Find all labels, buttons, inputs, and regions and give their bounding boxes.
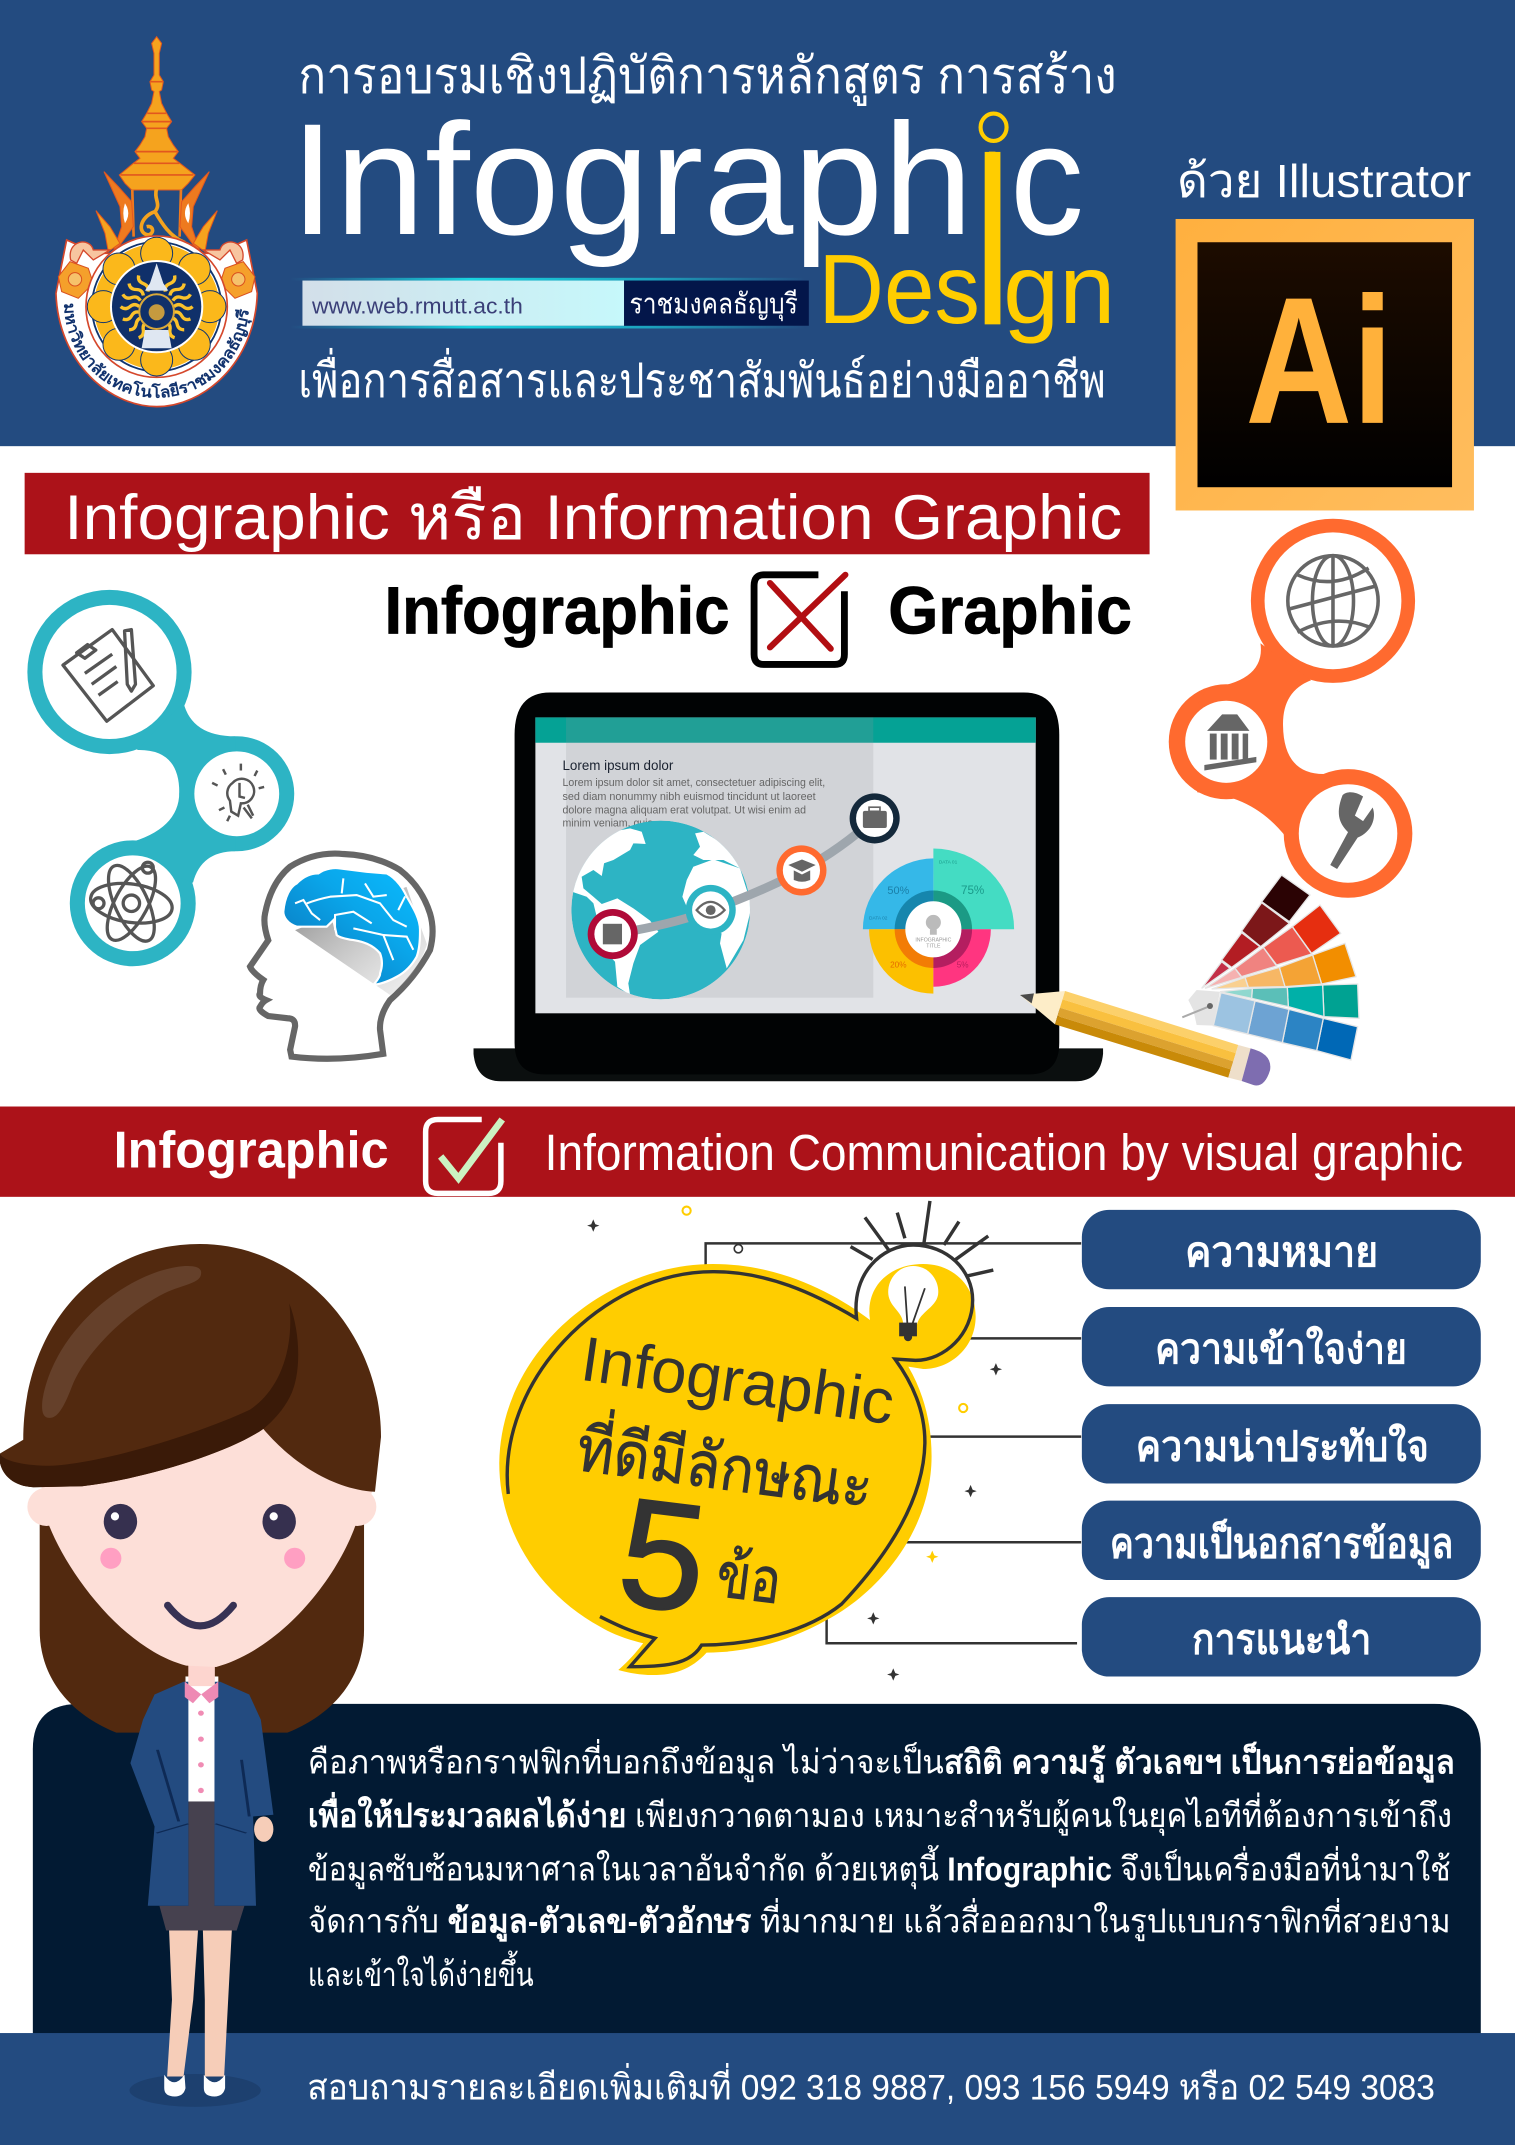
panel: header background <box>0 0 1515 446</box>
heading: Infographic Design wordmark: c <box>1010 90 1084 268</box>
icon: bank building <box>1204 714 1256 771</box>
text block: description: เพื่อให้ประมวลผลได้ง่าย เพียงกวาดตามอง เหมาะสำหรับผู้คนในยุคไอทีที่ต้องการเข้าถึง <box>308 1791 1452 1836</box>
swatch strip: oranges <box>1212 943 1356 989</box>
heading: Infographic Design wordmark: Infograph <box>290 90 973 268</box>
text block: description: คือภาพหรือกราฟฟิกที่บอกถึงข้อมูล ไม่ว่าจะเป็นสถิติ ความรู้ ตัวเลขฯ เป็นการย่อข้อมูล <box>308 1739 1455 1784</box>
comparison: Infographic is not just Graphic <box>385 574 1132 664</box>
donut chart: INFOGRAPHIC <box>915 938 952 944</box>
brain shadow <box>295 887 427 995</box>
fringe <box>0 1244 381 1492</box>
donut chart: 50% <box>887 885 910 897</box>
icon: bulb with clock <box>212 764 264 821</box>
text block: description: ข้อมูลซับซ้อนมหาศาลในเวลาอันจำกัด ด้วยเหตุนี้ Infographic จึงเป็นเครื่องมือที่นำมาใช้ <box>308 1844 1451 1889</box>
icon group: orange bubbles <box>1169 519 1415 898</box>
donut chart: DATA 02 <box>869 916 888 922</box>
pill: easy to understand <box>1082 1307 1481 1386</box>
hair highlight <box>42 1266 201 1418</box>
website address bar: ราชมงคลธัญบุรี <box>630 288 798 321</box>
laptop with infographic dashboard <box>474 693 1103 1081</box>
text block: contact details: สอบถามรายละเอียดเพิ่มเติมที่ 092 318 9887, 093 156 5949 หรือ 02 549 3083 <box>307 2062 1435 2107</box>
pill: meaning <box>1082 1210 1481 1289</box>
jacket right panel <box>214 1682 273 1906</box>
speech bubble: five characteristics: Infographic <box>577 1324 898 1438</box>
donut chart: 20% <box>890 961 907 970</box>
screen text: Lorem ipsum dolor sit amet, consectetuer adipiscing elit, <box>562 777 825 789</box>
donut chart: 5% <box>957 961 969 970</box>
icon: atom <box>88 859 175 947</box>
neck <box>188 1659 215 1686</box>
screen text: sed diam nonummy nibh euismod tincidunt ut laoreet <box>562 791 816 803</box>
pill: guidance: การแนะนำ <box>1192 1616 1371 1662</box>
icon: Adobe Illustrator logo <box>1176 219 1474 510</box>
connector lines <box>706 1243 1081 1643</box>
smile <box>168 1605 233 1626</box>
globe <box>571 821 750 999</box>
icon group: teal knowledge bubbles <box>27 590 294 966</box>
comparison: Infographic is not just Graphic: Graphic <box>888 574 1132 649</box>
text block: description <box>308 1739 1455 1994</box>
screen text <box>562 758 825 830</box>
screen text: minim veniam, quis <box>562 818 653 830</box>
eyes <box>104 1504 137 1539</box>
swatch strip: reds <box>1205 905 1341 988</box>
icon: wrench <box>1330 792 1374 869</box>
character: businesswoman <box>0 1244 381 2107</box>
speech bubble: five characteristics: ที่ดีมีลักษณะ <box>573 1405 878 1523</box>
donut chart <box>863 849 1014 994</box>
screen text: Lorem ipsum dolor <box>562 758 674 773</box>
pill: unique information <box>1082 1501 1481 1580</box>
icon: check box <box>426 1120 502 1193</box>
heading: Infographic Design wordmark: gn <box>1003 234 1115 344</box>
website address bar <box>290 278 809 328</box>
brain <box>283 868 420 985</box>
heading: Infographic Design wordmark: i <box>984 235 1000 344</box>
website address bar: www.web.rmutt.ac.th <box>311 293 523 318</box>
heading: with Illustrator: ด้วย Illustrator <box>1177 155 1471 207</box>
screen text: dolore magna aliquam erat volutpat. Ut wisi enim ad <box>562 804 806 816</box>
speech bubble: five characteristics: ข้อ <box>713 1540 785 1618</box>
panel: footer background <box>0 2033 1515 2145</box>
heading: training course line: การอบรมเชิงปฏิบัติการหลักสูตร การสร้าง <box>298 47 1117 106</box>
heading: purpose line: เพื่อการสื่อสารและประชาสัมพันธ์อย่างมืออาชีพ <box>298 348 1106 408</box>
heading: Infographic Design wordmark: i <box>984 94 1000 268</box>
timeline path <box>613 818 875 934</box>
face <box>41 1423 372 1667</box>
speech bubble: five characteristics <box>499 1201 993 1675</box>
donut chart: 75% <box>961 884 984 897</box>
shirt <box>185 1676 218 1801</box>
pill: impressive <box>1082 1404 1481 1484</box>
jacket left panel <box>130 1682 188 1906</box>
pill: easy to understand: ความเข้าใจง่าย <box>1155 1325 1407 1372</box>
hand <box>254 1816 273 1842</box>
icon: Adobe Illustrator logo: Ai <box>1245 260 1393 462</box>
fringe shadow <box>0 1303 298 1487</box>
donut chart: TITLE <box>926 944 941 950</box>
comparison: Infographic is not just Graphic: Infographic <box>385 574 729 649</box>
swatch strip: dark reds <box>1202 875 1310 988</box>
shirt buttons <box>198 1710 204 1793</box>
text block: description: และเข้าใจได้ง่ายขึ้น <box>308 1950 534 1994</box>
text block: description: จัดการกับ ข้อมูล-ตัวเลข-ตัวอักษร ที่มากมาย แล้วสื่อออกมาในรูปแบบกราฟิกที่สวยงาม <box>308 1897 1451 1942</box>
icon: clipboard <box>63 630 153 721</box>
right shoe <box>204 2075 225 2096</box>
banner: Infographic equals information communication <box>0 1107 1515 1197</box>
pill: impressive: ความน่าประทับใจ <box>1136 1422 1429 1469</box>
heading: Infographic Design wordmark: Des <box>818 234 980 344</box>
left shoe <box>164 2075 185 2096</box>
speech bubble: five characteristics: 5 <box>610 1466 716 1646</box>
banner: Infographic equals information communication: Infographic <box>114 1121 389 1179</box>
skirt <box>159 1800 244 1930</box>
donut chart: DATA 01 <box>939 860 958 866</box>
bow <box>185 1682 218 1703</box>
body <box>130 1676 273 2096</box>
panel: description background <box>33 1704 1481 2034</box>
pill: meaning: ความหมาย <box>1185 1229 1378 1275</box>
icon: colour swatch fan <box>1182 875 1359 1060</box>
pill: guidance <box>1082 1597 1481 1677</box>
swatch strip: blues <box>1213 993 1358 1060</box>
university crest logo: มหาวิทยาลัยเทคโนโลยีราชมงคลธัญบุรี <box>64 304 252 398</box>
node: graduation cap <box>776 845 826 895</box>
pill: unique information: ความเป็นอกสารข้อมูล <box>1110 1518 1453 1569</box>
cheeks <box>100 1548 121 1569</box>
shadow at feet <box>129 2074 261 2107</box>
hair back <box>40 1492 364 1733</box>
list: five characteristics pills <box>1082 1210 1481 1677</box>
swatch strip: teals <box>1220 984 1359 1018</box>
icon: head with brain <box>250 854 433 1059</box>
banner: Infographic or Information Graphic: Infographic หรือ Information Graphic <box>64 483 1122 553</box>
university crest logo <box>55 36 258 408</box>
ears <box>27 1488 66 1526</box>
node: eye <box>686 885 736 935</box>
sparkles <box>587 1207 1002 1681</box>
node: book <box>588 909 638 959</box>
heading: Infographic Design wordmark <box>290 90 1115 344</box>
legs <box>167 1930 198 2076</box>
icon: globe <box>1288 556 1378 646</box>
node: briefcase <box>850 793 900 843</box>
icon: pencil <box>1020 991 1270 1085</box>
icon: idea bulb <box>851 1201 993 1341</box>
